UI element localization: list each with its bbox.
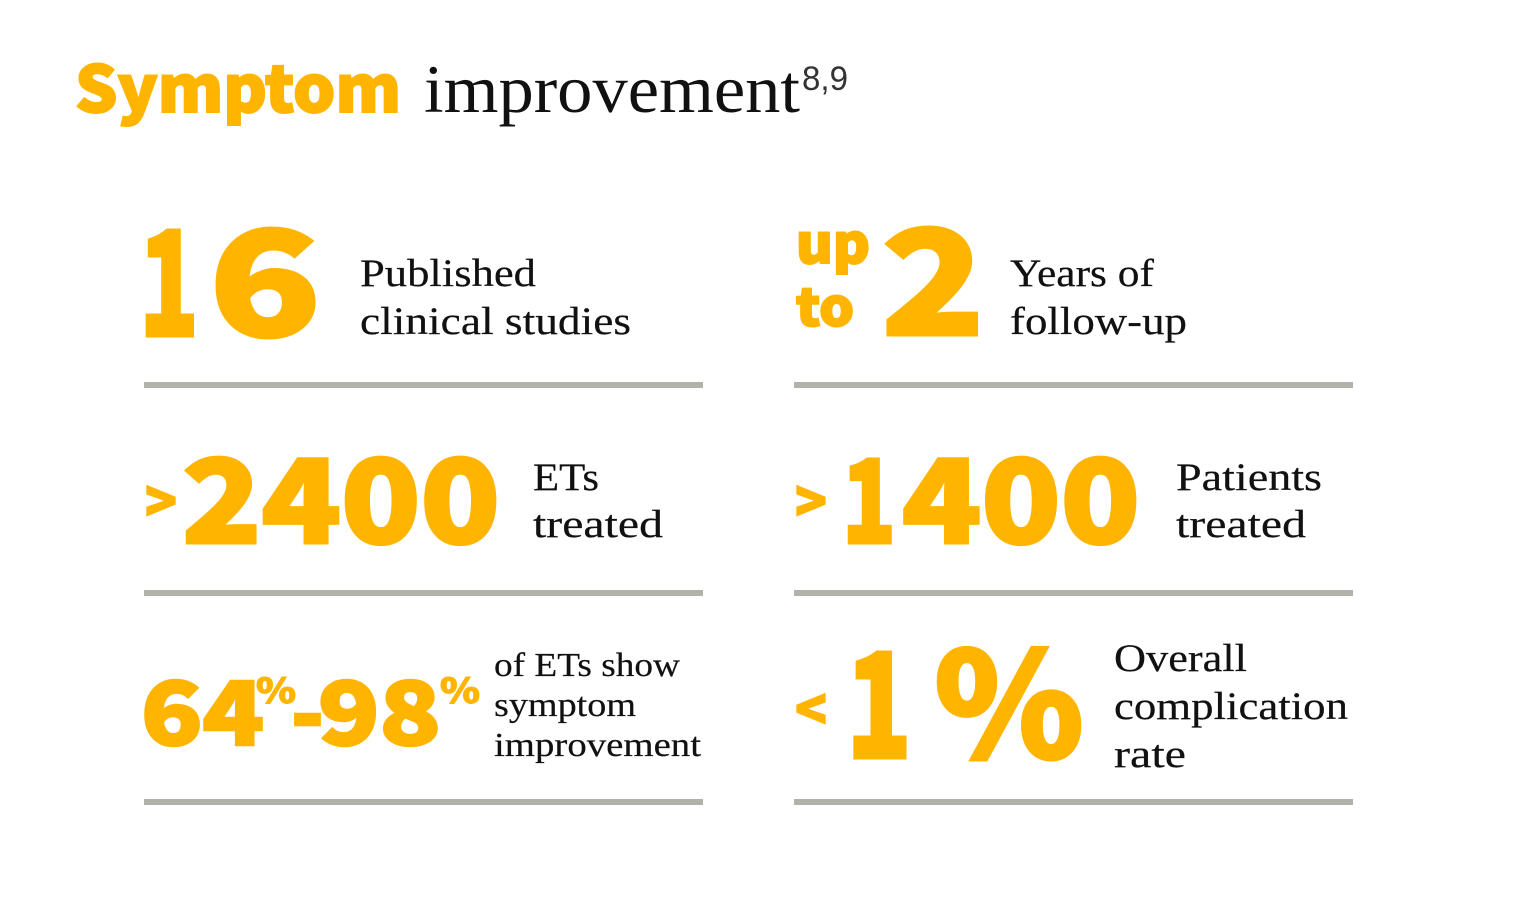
panel: years of follow-up: Years of (1010, 252, 1154, 295)
panel: symptom improvement range: % (256, 664, 296, 713)
title: Symptom (75, 39, 401, 131)
panel: ETs treated: ETs (533, 456, 599, 499)
panel: published studies (139, 168, 703, 388)
panel: complication rate: 1 (846, 590, 912, 801)
title: improvement (424, 51, 800, 127)
panel: patients treated: treated (1176, 503, 1307, 546)
panel: published studies: 6 (209, 168, 321, 379)
panel: complication rate: rate (1114, 733, 1186, 776)
panel: complication rate: complication (1114, 685, 1348, 728)
panel: years of follow-up: to (796, 266, 854, 341)
panel: years of follow-up: up (796, 200, 870, 279)
panel: published studies: 1 (139, 168, 199, 379)
panel: years of follow-up: 2 (881, 167, 985, 378)
panel: ETs treated: > (145, 458, 177, 539)
panel: patients treated (794, 409, 1353, 596)
panel: ETs treated: treated (533, 503, 664, 546)
panel: complication rate: % (934, 590, 1084, 801)
panel: symptom improvement range: improvement (494, 727, 702, 764)
panel: complication rate: < (795, 666, 827, 747)
panel: years of follow-up (794, 167, 1353, 388)
panel: ETs treated: 2400 (182, 409, 500, 577)
panel: published studies: clinical studies (360, 300, 631, 343)
panel: published studies: Published (360, 252, 537, 295)
panel: complication rate: Overall (1114, 637, 1247, 680)
title (75, 39, 848, 131)
panel: years of follow-up: follow-up (1010, 300, 1187, 343)
panel: symptom improvement range: 64 (141, 644, 264, 771)
title: 8,9 (802, 60, 848, 98)
panel: symptom improvement range: - (291, 644, 324, 771)
panel: symptom improvement range: of ETs show (494, 647, 680, 684)
panel: symptom improvement range: % (440, 664, 480, 713)
panel: patients treated: 400 (902, 409, 1140, 577)
panel: symptom improvement range: 98 (318, 644, 441, 771)
panel: patients treated: 1 (842, 409, 896, 577)
panel: symptom improvement range: symptom (494, 687, 636, 724)
panel: complication rate (794, 590, 1353, 805)
panel: patients treated: Patients (1176, 456, 1322, 499)
panel: symptom improvement range (141, 644, 703, 805)
panel: ETs treated (144, 409, 703, 596)
panel: patients treated: > (795, 458, 827, 539)
